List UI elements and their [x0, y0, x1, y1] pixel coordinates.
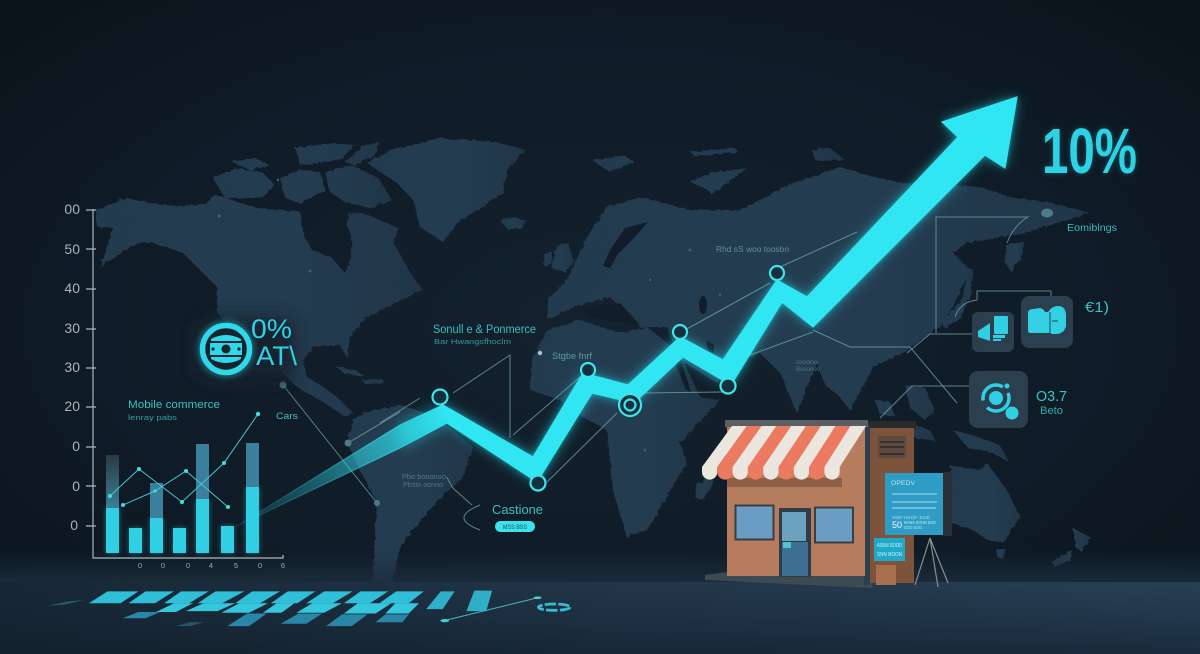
arrow tight glow	[443, 97, 1017, 482]
map: eurasia	[547, 167, 1090, 413]
chart heading: Cars	[276, 411, 299, 421]
headline figure: 10%	[1042, 115, 1137, 187]
icon tile: wallet	[1021, 296, 1073, 348]
billboard: OPEDV	[891, 480, 916, 487]
stripes: middle row	[156, 603, 419, 614]
map: star specks	[218, 179, 721, 451]
billboard: NSW YOHSF JUSD	[892, 515, 931, 520]
y axis labels: 30	[64, 320, 80, 336]
tripod	[915, 538, 948, 587]
storefront	[702, 420, 952, 588]
trend lines	[110, 414, 258, 507]
small sign	[874, 538, 905, 561]
awning shadow	[727, 478, 842, 487]
earnings label: Eomiblngs	[1067, 223, 1117, 234]
map: caribbean	[335, 366, 385, 384]
y axis labels: 40	[64, 280, 80, 296]
y axis labels: 0	[70, 517, 78, 533]
arrow nodes	[432, 266, 784, 490]
small sign: ASNN SOOD	[877, 543, 902, 549]
map: africa	[530, 320, 720, 537]
headline figure: 10%	[1042, 115, 1137, 187]
map: kamchatka	[1005, 242, 1024, 272]
map annotations: Pbo booonoo	[402, 474, 446, 481]
map annotations	[402, 245, 821, 517]
store front wall	[727, 427, 865, 576]
chart axes	[86, 209, 283, 558]
bars: bright segments	[106, 487, 259, 553]
chart heading: Mobile commerce	[128, 399, 220, 411]
main growth arrow	[235, 97, 1017, 527]
map: northern islands	[592, 148, 845, 195]
billboard	[885, 472, 952, 536]
badge icon	[202, 326, 250, 372]
x axis labels: 0	[138, 561, 142, 570]
map: australia	[950, 463, 1020, 543]
y axis labels: 0	[72, 438, 80, 454]
x axis labels: 0	[186, 561, 190, 570]
bars: upper muted segments	[106, 443, 259, 518]
stripes: top row	[89, 591, 424, 603]
stripes: separate bars	[426, 591, 492, 611]
badge text	[251, 314, 298, 371]
x axis labels: 5	[234, 561, 238, 570]
store base	[705, 572, 873, 588]
floor data stripes	[47, 591, 570, 626]
y axis labels: 50	[64, 241, 80, 257]
castione pill: MSS BSS	[503, 525, 527, 531]
map: new guinea	[953, 430, 1008, 461]
icon tile: megaphone and device	[972, 312, 1014, 352]
map annotations: Isoono	[796, 360, 819, 366]
map: inland seas	[582, 212, 925, 392]
label: 03.7 beto: Beto	[1040, 405, 1063, 417]
store side wall	[864, 421, 916, 585]
stripes: faint bars	[47, 600, 204, 626]
x axis labels: 0	[258, 561, 262, 570]
chart heading: lenray pabs	[128, 413, 177, 422]
map: greenland	[367, 138, 525, 242]
crate	[876, 565, 896, 585]
x axis labels	[138, 561, 285, 570]
thin connector lines	[283, 217, 1051, 530]
billboard: MSNS SOON SOO	[904, 520, 936, 525]
map annotations: Rhd sS woo toosbn	[716, 245, 789, 254]
map annotations: Bar Hwangsfhoclm	[434, 337, 511, 346]
billboard: 50	[892, 520, 902, 530]
y axis labels: 0	[72, 478, 80, 494]
map: british isles	[544, 242, 574, 272]
badge text: AT\	[256, 341, 298, 371]
chart heading	[128, 399, 299, 422]
bar glow	[106, 487, 259, 553]
billboard: SOO SOO	[904, 525, 922, 530]
map: japan	[942, 268, 973, 328]
trend points	[108, 412, 260, 509]
map: north america	[96, 195, 423, 416]
store right window	[815, 508, 853, 542]
awning top bar	[725, 420, 868, 427]
map: arctic islands	[213, 142, 392, 208]
icon tile: orbit	[969, 371, 1028, 428]
arrow glow	[400, 97, 1017, 482]
map: tasmania	[996, 549, 1006, 558]
label: e1: €1)	[1085, 299, 1109, 316]
x axis labels: 6	[281, 561, 285, 570]
y axis labels: 30	[64, 359, 80, 375]
small sign: SNN BOON	[877, 552, 902, 558]
arrow body	[235, 97, 1017, 527]
store left window	[736, 506, 774, 540]
chart: bars and lines	[64, 201, 285, 570]
map: south east asia islands	[855, 385, 935, 450]
stripes: lower row	[123, 612, 409, 626]
map: iceland	[500, 217, 527, 230]
stat badge: 0% AT	[195, 314, 298, 382]
label: 03.7 beto: O3.7	[1036, 389, 1067, 405]
store door	[779, 508, 811, 577]
awning stripes	[702, 426, 866, 480]
world map	[96, 138, 1090, 590]
y axis labels	[64, 201, 80, 533]
connector nodes	[280, 208, 1053, 506]
badge text: 0%	[251, 314, 292, 344]
map: new zealand	[1052, 528, 1090, 567]
x axis labels: 0	[161, 561, 165, 570]
map annotations: Pbsto oonno	[403, 482, 443, 489]
label: 03.7 beto	[1036, 389, 1067, 417]
map annotations: Castione	[492, 502, 543, 517]
castione pill	[495, 521, 535, 532]
map: madagascar	[695, 477, 714, 500]
map annotations: Bsoonoo	[796, 367, 821, 373]
map: south america	[347, 405, 473, 590]
y axis labels: 20	[64, 398, 80, 414]
map annotations: Sonull e & Ponmerce	[433, 324, 536, 336]
floor	[0, 550, 1200, 654]
x axis labels: 4	[209, 561, 213, 570]
y axis labels: 00	[64, 201, 80, 217]
map annotations: Stgbe fnrf	[552, 351, 592, 362]
